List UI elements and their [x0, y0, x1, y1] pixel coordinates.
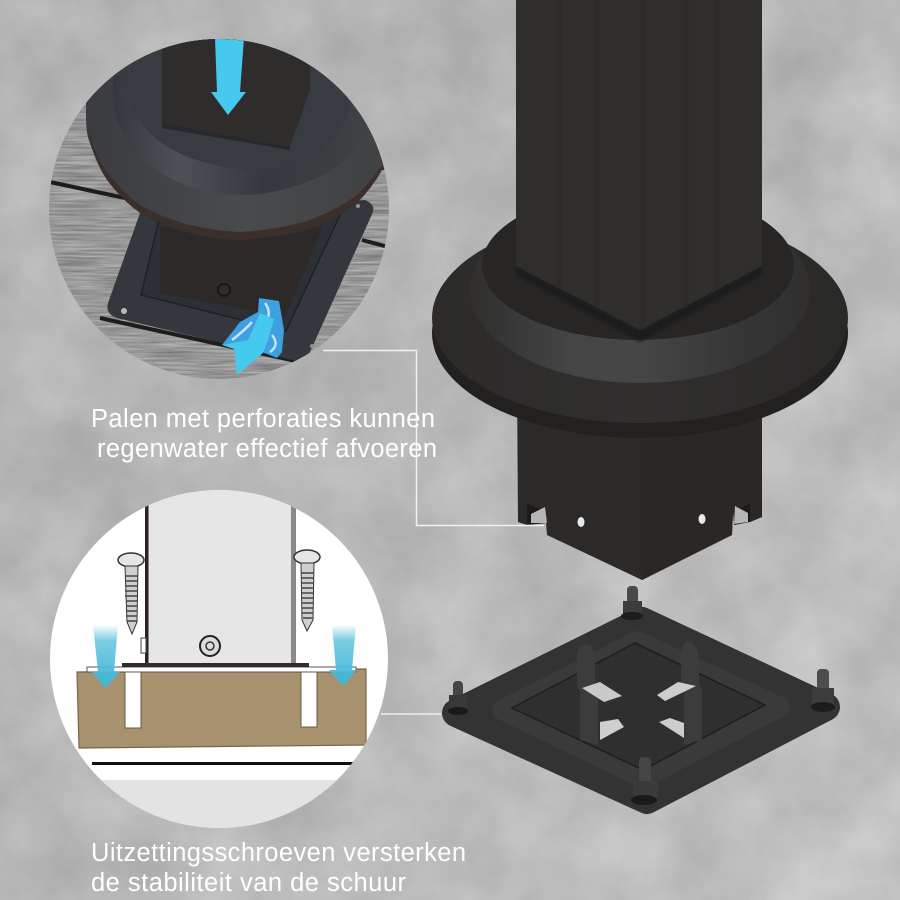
wood block — [77, 669, 366, 748]
icon: water arrow down — [211, 38, 246, 115]
flange base rim — [432, 228, 848, 438]
post below flange — [160, 227, 323, 317]
icon: arrow left — [92, 625, 120, 688]
icon: screw left — [118, 553, 144, 634]
bolt right — [811, 669, 835, 712]
embossed ring — [502, 641, 780, 778]
anchor slots — [125, 672, 317, 728]
inset circle: screw diagram — [40, 490, 400, 840]
connector line: drainage — [323, 350, 544, 526]
left bracket — [577, 644, 624, 745]
text: drainage caption: regenwater effectief afvoeren — [97, 435, 437, 463]
icon: arrow right — [329, 625, 357, 686]
icon: water arrow out — [222, 313, 274, 375]
icon: screw right — [294, 550, 320, 631]
text: stability caption: Uitzettingsschroeven versterken — [91, 839, 466, 867]
text: stability caption — [91, 839, 466, 897]
flange upper surface — [432, 213, 848, 423]
bolt front — [631, 757, 658, 805]
right bracket — [657, 641, 702, 745]
recessed centre — [512, 643, 765, 770]
inset flange — [86, 39, 384, 240]
floor band — [102, 780, 336, 828]
flange raised ring — [470, 197, 810, 383]
connector line: plate — [381, 713, 441, 715]
post lower section — [517, 380, 762, 580]
decking — [49, 102, 389, 379]
inset circle: drainage detail — [49, 39, 389, 379]
post upper section — [516, 0, 762, 342]
product: upright post with flange — [432, 0, 848, 580]
base strip — [87, 663, 356, 672]
water splash — [222, 298, 284, 358]
plate body — [456, 621, 826, 800]
text: drainage caption — [91, 405, 437, 463]
post profile — [141, 490, 296, 663]
bolt left — [448, 681, 468, 715]
flange inner plateau — [482, 190, 794, 340]
text: drainage caption: Palen met perforaties kunnen — [91, 405, 435, 433]
mounting plate — [107, 200, 373, 361]
text: stability caption: de stabiliteit van de schuur — [91, 869, 406, 897]
floor line — [92, 762, 360, 765]
bolt top — [621, 586, 643, 620]
base plate with bolts — [448, 586, 835, 805]
